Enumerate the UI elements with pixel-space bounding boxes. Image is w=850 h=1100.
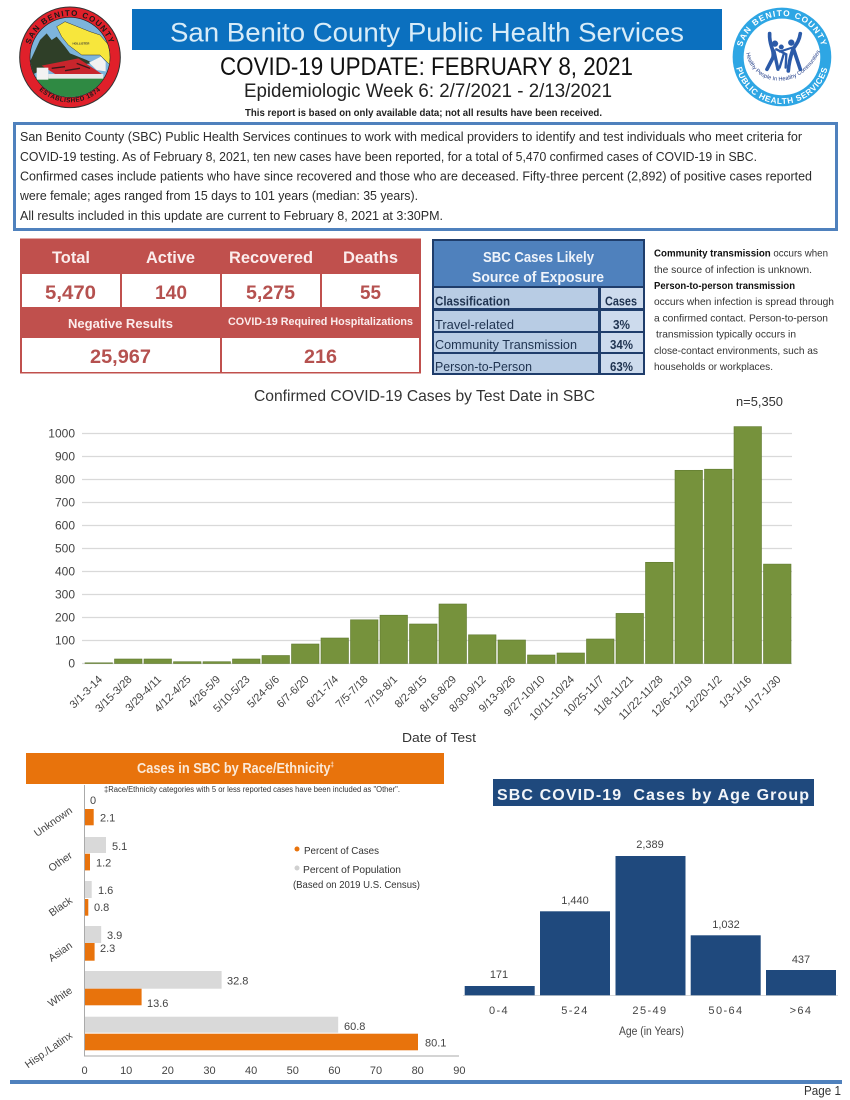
- logo: Public Health Services seal: SAN BENITO COUNTY: [737, 10, 827, 46]
- bar chart: confirmed cases by test date: 700: [55, 496, 75, 510]
- axis title: date of test: Date of Test: [402, 730, 476, 745]
- bar chart: cases by age group: 0-4: [489, 1005, 509, 1017]
- bar chart: race/ethnicity: 50: [287, 1065, 299, 1077]
- logo: Public Health Services seal: Healthy People In Healthy Communities: [746, 50, 820, 81]
- bar chart: race/ethnicity: Hisp./Latinx: [23, 1029, 75, 1071]
- heading: cases by race/ethnicity: ‡: [331, 762, 334, 769]
- subtitle: epidemiologic week: Epidemiologic Week 6: 2/7/2021 - 2/13/2021: [244, 80, 612, 102]
- text block: transmission definitions: the source of infection is unknown.: [654, 264, 812, 276]
- bar chart: cases by age group: Age (in Years): [619, 1026, 684, 1038]
- panel: case counts table: 140: [155, 283, 187, 304]
- bar chart: race/ethnicity: 10: [120, 1065, 132, 1077]
- bar chart: confirmed cases by test date: 0: [68, 656, 75, 670]
- bar chart: confirmed cases by test date: [48, 426, 792, 723]
- panel: likely source of exposure table: 3%: [613, 317, 630, 332]
- bar chart: confirmed cases by test date: 4/26-5/9: [186, 674, 223, 711]
- header banner: San Benito County Public Health Services: [170, 18, 684, 48]
- footnote: race categories: ‡Race/Ethnicity categories with 5 or less reported cases have been included as "Other".: [104, 785, 400, 794]
- bar chart: race/ethnicity: 32.8: [227, 976, 248, 988]
- bar chart: confirmed cases by test date: 11/8-11/21: [592, 674, 636, 718]
- bar chart: confirmed cases by test date: 7/19-8/1: [363, 674, 400, 711]
- panel: likely source of exposure table: SBC Cases Likely: [483, 249, 595, 266]
- panel: case counts table: Recovered: [229, 248, 313, 267]
- bar chart: cases by age group: 25-49: [632, 1005, 668, 1017]
- panel: likely source of exposure table: Travel-related: [435, 317, 514, 332]
- panel: case counts table: COVID-19 Required Hospitalizations: [228, 316, 413, 328]
- title: COVID-19 update date: COVID-19 UPDATE: FEBRUARY 8, 2021: [220, 53, 633, 81]
- text block: transmission definitions: a confirmed contact. Person-to-person: [654, 312, 828, 324]
- footer rule: [10, 1080, 842, 1084]
- bar chart: confirmed cases by test date: 9/13-9/26: [477, 674, 518, 715]
- panel: case counts table: 25,967: [90, 347, 151, 368]
- bar chart: race/ethnicity: 13.6: [147, 998, 168, 1010]
- panel: summary text: Confirmed cases include patients who have since recovered and those who are deceased. Fifty-three percent (2,892) of positive cases reported: [20, 170, 812, 184]
- logo: San Benito County seal: ESTABLISHED 1874: [39, 87, 100, 102]
- bar chart: race/ethnicity: 90: [453, 1065, 466, 1077]
- bar chart: confirmed cases by test date: 7/5-7/18: [334, 674, 371, 711]
- panel: summary text: San Benito County (SBC) Public Health Services continues to work with medical providers to identify and test individuals who meet criteria for: [20, 130, 802, 144]
- bar chart: cases by age group: [463, 839, 838, 1038]
- bar chart: confirmed cases by test date: 500: [55, 542, 75, 556]
- bar chart: confirmed cases by test date: 12/6-12/19: [649, 674, 695, 719]
- bar chart: confirmed cases by test date: 100: [55, 634, 75, 648]
- bar chart: race/ethnicity: 1.2: [96, 858, 111, 870]
- heading: cases by race/ethnicity: [26, 753, 444, 784]
- bar chart: confirmed cases by test date: 600: [55, 518, 75, 532]
- chart legend: [293, 845, 420, 891]
- bar chart: confirmed cases by test date: 1/17-1/30: [742, 674, 784, 715]
- panel: likely source of exposure table: 63%: [610, 359, 633, 374]
- panel: summary text: COVID-19 testing. As of February 8, 2021, ten new cases have been reported, for a total of 5,470 confirmed cases of COVID-19 in SBC.: [20, 150, 757, 164]
- bar chart: confirmed cases by test date: 10/25-11/7: [562, 674, 607, 719]
- bar chart: cases by age group: 2,389: [636, 839, 664, 851]
- panel: case counts table: 5,275: [246, 283, 295, 304]
- bar chart: cases by age group: 171: [490, 969, 508, 981]
- bar chart: confirmed cases by test date: 3/1-3-14: [68, 674, 105, 711]
- panel: summary text: [14, 124, 836, 230]
- text block: transmission definitions: households or workplaces.: [654, 361, 773, 373]
- bar chart: confirmed cases by test date: 8/16-8/29: [418, 674, 459, 715]
- bar chart: race/ethnicity: Asian: [46, 940, 75, 965]
- sample size note: n=5,350: [736, 395, 783, 409]
- bar chart: confirmed cases by test date: 12/20-1/2: [683, 674, 725, 715]
- heading: cases by race/ethnicity: Cases in SBC by Race/Ethnicity: [137, 761, 356, 777]
- bar chart: confirmed cases by test date: 6/7-6/20: [275, 674, 312, 711]
- data disclaimer: This report is based on only available data; not all results have been received.: [245, 107, 602, 119]
- bar chart: race/ethnicity: 80.1: [425, 1038, 446, 1050]
- bar chart: confirmed cases by test date: 9/27-10/10: [502, 674, 548, 719]
- bar chart: race/ethnicity: 70: [370, 1065, 382, 1077]
- panel: case counts table: Deaths: [343, 248, 398, 267]
- panel: summary text: were female; ages ranged from 15 days to 101 years (median: 35 years).: [19, 189, 418, 203]
- text block: transmission definitions: [654, 248, 834, 373]
- chart title: cases by test date: Confirmed COVID-19 Cases by Test Date in SBC: [254, 388, 595, 405]
- heading: cases by age group: SBC COVID-19 Cases by Age Group: [497, 787, 809, 804]
- bar chart: race/ethnicity: Unknown: [32, 805, 75, 840]
- bar chart: cases by age group: 50-64: [708, 1005, 744, 1017]
- bar chart: race/ethnicity: 20: [162, 1065, 174, 1077]
- bar chart: race/ethnicity: 0: [81, 1065, 88, 1077]
- panel: case counts table: [20, 238, 421, 374]
- bar chart: confirmed cases by test date: 1/3-1/16: [717, 674, 754, 711]
- bar chart: confirmed cases by test date: 8/30-9/12: [447, 674, 489, 715]
- bar chart: confirmed cases by test date: 11/22-11/28: [617, 674, 666, 722]
- heading: cases by age group: [493, 779, 814, 806]
- bar chart: race/ethnicity: 1.6: [98, 885, 113, 897]
- bar chart: confirmed cases by test date: 800: [55, 472, 75, 486]
- panel: likely source of exposure table: Classification: [435, 294, 510, 308]
- bar chart: confirmed cases by test date: 8/2-8/15: [393, 674, 430, 711]
- panel: case counts table: Active: [146, 248, 195, 267]
- bar chart: race/ethnicity: 40: [245, 1065, 257, 1077]
- chart legend: Percent of Population: [303, 864, 401, 876]
- panel: case counts table: Negative Results: [68, 316, 173, 331]
- text block: transmission definitions: transmission typically occurs in: [656, 328, 796, 340]
- bar chart: confirmed cases by test date: 3/29-4/11: [123, 674, 164, 714]
- bar chart: cases by age group: 5-24: [561, 1005, 589, 1017]
- bar chart: cases by age group: 1,032: [712, 919, 740, 931]
- text block: transmission definitions: Community transmission occurs when: [654, 248, 828, 260]
- bar chart: confirmed cases by test date: 3/15-3/28: [93, 674, 135, 715]
- bar chart: confirmed cases by test date: 4/12-4/25: [152, 674, 194, 715]
- logo: San Benito County seal: HOLLISTER: [73, 41, 90, 45]
- logo: Public Health Services seal: [732, 8, 832, 106]
- bar chart: confirmed cases by test date: 400: [55, 564, 75, 578]
- bar chart: race/ethnicity: 2.3: [100, 943, 115, 955]
- bar chart: race/ethnicity: 60: [328, 1065, 341, 1077]
- bar chart: race/ethnicity: White: [46, 985, 75, 1010]
- text block: transmission definitions: occurs when infection is spread through: [654, 296, 834, 308]
- header banner: [132, 9, 722, 50]
- bar chart: confirmed cases by test date: 5/10-5/23: [211, 674, 253, 715]
- panel: case counts table: 216: [304, 347, 337, 368]
- panel: likely source of exposure table: Cases: [605, 294, 637, 308]
- chart legend: Percent of Cases: [304, 845, 379, 857]
- bar chart: confirmed cases by test date: 5/24-6/6: [245, 674, 282, 711]
- bar chart: confirmed cases by test date: 10/11-10/24: [528, 674, 577, 723]
- panel: likely source of exposure table: Person-to-Person: [435, 359, 532, 374]
- bar chart: cases by age group: 437: [792, 954, 810, 966]
- panel: case counts table: 55: [360, 283, 381, 304]
- bar chart: race/ethnicity: 60.8: [344, 1021, 365, 1033]
- bar chart: confirmed cases by test date: 300: [55, 588, 75, 602]
- logo: San Benito County seal: [19, 6, 121, 108]
- panel: likely source of exposure table: Community Transmission: [435, 337, 577, 352]
- bar chart: race/ethnicity: 0: [90, 795, 96, 807]
- text block: transmission definitions: Person-to-person transmission: [654, 280, 795, 292]
- bar chart: confirmed cases by test date: 200: [55, 610, 75, 624]
- bar chart: cases by age group: >64: [790, 1005, 812, 1017]
- bar chart: confirmed cases by test date: 6/21-7/4: [304, 674, 341, 711]
- bar chart: confirmed cases by test date: 1000: [48, 426, 75, 440]
- panel: likely source of exposure table: 34%: [610, 337, 633, 352]
- bar chart: race/ethnicity: 0.8: [94, 902, 109, 914]
- text block: transmission definitions: close-contact environments, such as: [654, 345, 818, 357]
- bar chart: race/ethnicity: Other: [46, 849, 75, 875]
- bar chart: race/ethnicity: 80: [412, 1065, 424, 1077]
- bar chart: race/ethnicity: [23, 785, 466, 1077]
- bar chart: race/ethnicity: 5.1: [112, 841, 127, 853]
- logo: San Benito County seal: SAN BENITO COUNTY: [26, 10, 114, 44]
- bar chart: race/ethnicity: 2.1: [100, 812, 115, 824]
- bar chart: race/ethnicity: 3.9: [107, 930, 122, 942]
- bar chart: confirmed cases by test date: 900: [55, 450, 75, 464]
- bar chart: race/ethnicity: 30: [203, 1065, 216, 1077]
- panel: case counts table: 5,470: [45, 283, 96, 304]
- panel: likely source of exposure table: Source of Exposure: [472, 269, 604, 286]
- panel: summary text: All results included in this update are current to February 8, 2021 at 3:30PM.: [20, 209, 443, 223]
- panel: case counts table: Total: [52, 248, 90, 267]
- panel: likely source of exposure table: [432, 239, 645, 375]
- bar chart: cases by age group: 1,440: [561, 895, 589, 907]
- logo: Public Health Services seal: PUBLIC HEALTH SERVICES: [736, 66, 827, 104]
- chart legend: (Based on 2019 U.S. Census): [293, 879, 420, 891]
- page number: Page 1: [804, 1083, 841, 1098]
- bar chart: race/ethnicity: Black: [47, 894, 75, 919]
